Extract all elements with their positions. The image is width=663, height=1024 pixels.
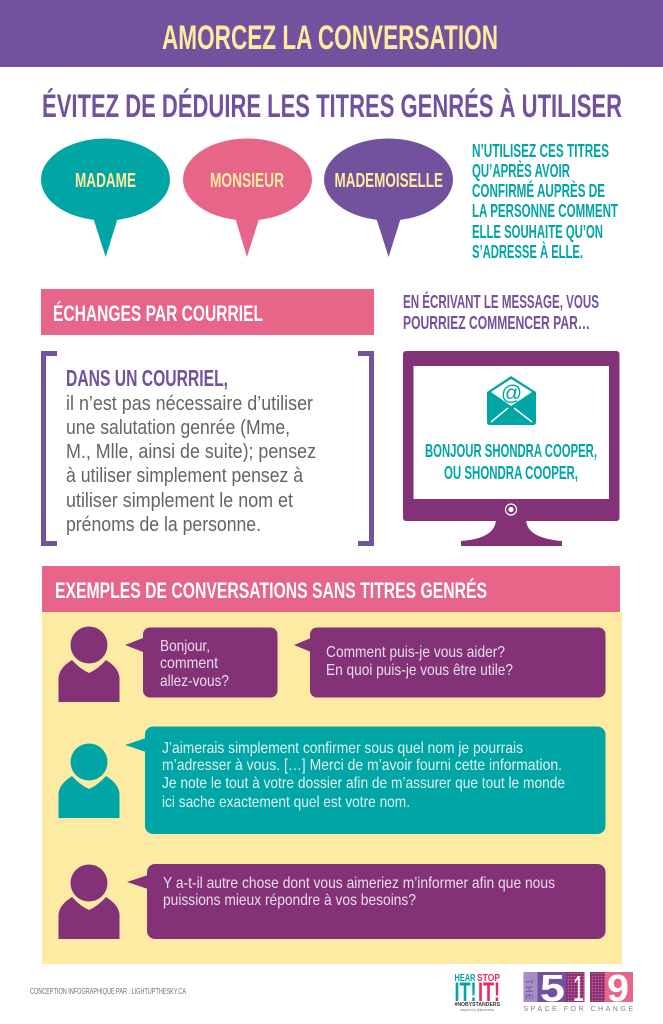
bracketed email advice: prénoms de la personne. bbox=[66, 514, 261, 536]
logo: hear it stop it: IT! bbox=[454, 977, 476, 1007]
logo: hear it stop it: inspired by @jtnmeedia bbox=[460, 1008, 494, 1012]
logo: the 519: SPACE FOR CHANGE bbox=[524, 1006, 633, 1013]
bracketed email advice: DANS UN COURRIEL, bbox=[66, 365, 228, 391]
speech bubble: madame bbox=[41, 138, 170, 257]
speech bubble: confirm name bbox=[125, 726, 606, 834]
speech bubble: anything else bbox=[127, 864, 606, 939]
title: AMORCEZ LA CONVERSATION bbox=[162, 19, 498, 57]
speech bubble: mademoiselle bbox=[324, 138, 453, 257]
speech bubble: mademoiselle: MADEMOISELLE bbox=[334, 170, 443, 192]
speech bubble: offer of help bbox=[294, 628, 606, 698]
logo: the 519: 9 bbox=[607, 968, 629, 1010]
logo: hear it stop it: STOP bbox=[477, 972, 500, 984]
email section heading bar: ÉCHANGES PAR COURRIEL bbox=[53, 301, 263, 326]
bracketed email advice: à utiliser simplement pensez à bbox=[66, 465, 304, 487]
speech bubble: confirm name: Je note le tout à votre dossier afin de m’assurer que tout le monde bbox=[162, 775, 565, 792]
logo: the 519 bbox=[524, 968, 633, 1013]
speech bubble: confirm name: ici sache exactement quel est votre nom. bbox=[162, 794, 410, 811]
teal advice text: S’ADRESSE À ELLE. bbox=[472, 241, 583, 262]
teal advice text bbox=[472, 141, 618, 262]
conversations panel background bbox=[42, 612, 622, 964]
bracketed email advice: M., Mlle, ainsi de suite); pensez bbox=[66, 441, 316, 463]
logo: the 519: 1 bbox=[573, 968, 584, 1009]
computer monitor bbox=[403, 351, 620, 546]
logo: the 519: 5 bbox=[540, 968, 565, 1010]
speech bubble: anything else: puissions mieux répondre à vos besoins? bbox=[163, 892, 416, 909]
speech bubble: confirm name: m’adresser à vous. […] Merci de m’avoir fourni cette information. bbox=[162, 757, 562, 774]
bracketed email advice: utiliser simplement le nom et bbox=[66, 490, 293, 512]
icon: person teal bbox=[58, 744, 120, 818]
speech bubble: greeting: comment bbox=[160, 655, 218, 672]
logo: the 519: THE bbox=[524, 979, 534, 1002]
speech bubble: greeting: Bonjour, bbox=[160, 638, 210, 655]
icon: person purple 1 bbox=[58, 626, 120, 702]
speech bubble: offer of help: Comment puis-je vous aider? bbox=[326, 644, 505, 661]
header banner bbox=[0, 0, 663, 67]
conversations heading bar: EXEMPLES DE CONVERSATIONS SANS TITRES GENRÉS bbox=[55, 578, 487, 603]
speech bubble: madame: MADAME bbox=[75, 170, 136, 192]
speech bubble: monsieur: MONSIEUR bbox=[210, 170, 284, 192]
logo: hear it stop it: #NOBYSTANDERS bbox=[454, 1002, 500, 1008]
conversations heading bar bbox=[42, 566, 620, 612]
teal advice text: QU’APRÈS AVOIR bbox=[472, 160, 570, 181]
bracketed email advice: il n’est pas nécessaire d’utiliser bbox=[66, 393, 313, 415]
icon: envelope bbox=[487, 376, 536, 425]
logo: hear it stop it: HEAR bbox=[454, 972, 476, 984]
speech bubble: anything else: Y a-t-il autre chose dont vous aimeriez m’informer afin que nous bbox=[163, 875, 555, 892]
logo: hear it stop it bbox=[454, 972, 500, 1012]
email section heading bar bbox=[41, 289, 374, 335]
email greeting: OU SHONDRA COOPER, bbox=[444, 463, 578, 483]
bracketed email advice bbox=[44, 354, 372, 544]
email message lead-in bbox=[403, 291, 599, 333]
speech bubble: greeting bbox=[125, 628, 278, 698]
speech bubble: greeting: allez-vous? bbox=[160, 673, 229, 690]
speech bubble: offer of help: En quoi puis-je vous être utile? bbox=[326, 662, 513, 679]
logo: hear it stop it: IT! bbox=[478, 977, 500, 1007]
icon: person purple 2 bbox=[58, 864, 120, 939]
email greeting bbox=[425, 441, 597, 483]
speech bubble: monsieur bbox=[183, 138, 312, 257]
speech bubble: confirm name: J’aimerais simplement confirmer sous quel nom je pourrais bbox=[162, 740, 523, 757]
icon: envelope: @ bbox=[501, 382, 522, 405]
bracketed email advice: une salutation genrée (Mme, bbox=[66, 417, 290, 439]
footer credit: CONCEPTION INFOGRAPHIQUE PAR : LIGHTUPTHESKY.CA bbox=[30, 986, 186, 996]
